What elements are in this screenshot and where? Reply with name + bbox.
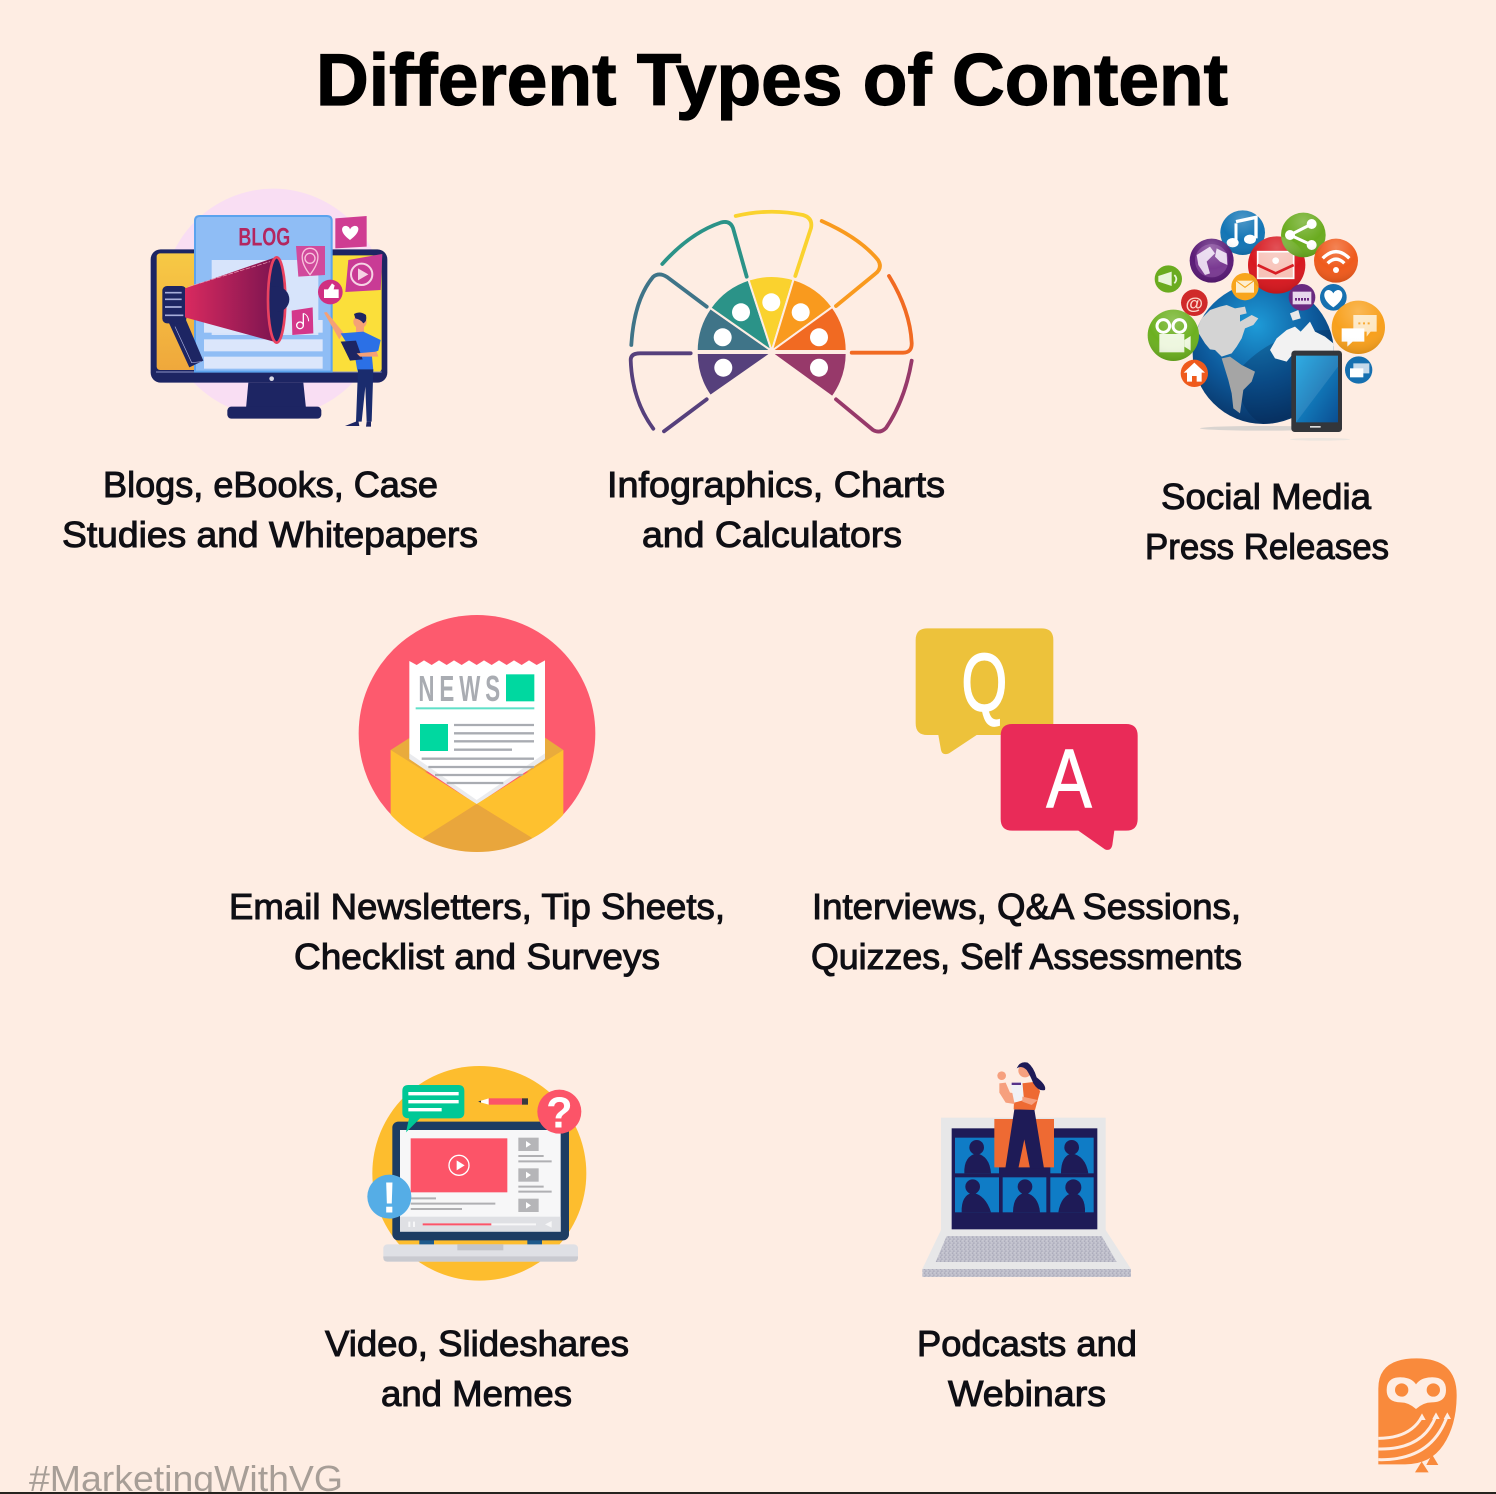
caption: blogs: Blogs, eBooks, Case — [103, 464, 438, 505]
icon: Q and A speech bubbles: A — [1046, 733, 1092, 826]
card: infographics — [607, 212, 945, 555]
card: podcasts — [917, 1062, 1137, 1414]
icon: Q and A speech bubbles: Q — [961, 638, 1007, 729]
icon: webinar laptop with presenter — [922, 1062, 1131, 1277]
icon: laptop with video player: ! — [382, 1174, 397, 1222]
caption: email newsletters — [229, 886, 725, 977]
caption: video: Video, Slideshares — [325, 1323, 629, 1364]
card: social media — [1145, 210, 1389, 567]
caption: podcasts: Podcasts and — [917, 1323, 1137, 1364]
card: video — [325, 1066, 629, 1414]
icon: globe with social bubbles: @ — [1186, 293, 1203, 313]
icon: newsletter in envelope — [359, 615, 595, 865]
caption: infographics: and Calculators — [642, 514, 902, 555]
bottom edge strip — [0, 1492, 1496, 1494]
caption: blogs — [62, 464, 478, 555]
caption: interviews: Interviews, Q&A Sessions, — [812, 886, 1241, 927]
title: Different Types of Content — [316, 40, 1228, 121]
icon: Q and A speech bubbles — [916, 628, 1138, 850]
card: blogs — [62, 189, 478, 555]
card: interviews — [811, 628, 1242, 977]
caption: podcasts — [917, 1323, 1137, 1414]
caption: email newsletters: Checklist and Surveys — [294, 936, 660, 977]
icon: laptop with video player — [367, 1066, 586, 1281]
caption: blogs: Studies and Whitepapers — [62, 514, 478, 555]
caption: video: and Memes — [381, 1373, 572, 1414]
caption: interviews: Quizzes, Self Assessments — [811, 936, 1242, 977]
caption: infographics — [607, 464, 945, 555]
icon: semi-circular segmented chart — [631, 212, 912, 432]
caption: social media — [1145, 476, 1389, 567]
card: email newsletters — [229, 615, 725, 977]
caption: video — [325, 1323, 629, 1414]
caption: interviews — [811, 886, 1242, 977]
caption: infographics: Infographics, Charts — [607, 464, 945, 505]
icon: laptop with video player: ? — [546, 1089, 573, 1137]
logo: orange owl — [1378, 1358, 1457, 1472]
icon: newsletter in envelope: NEWS — [418, 670, 505, 709]
icon: blog monitor with megaphone — [151, 189, 387, 427]
caption: social media: Social Media — [1161, 476, 1372, 517]
caption: podcasts: Webinars — [948, 1373, 1106, 1414]
caption: social media: Press Releases — [1145, 526, 1389, 567]
icon: globe with social bubbles — [1148, 210, 1385, 441]
caption: email newsletters: Email Newsletters, Tip Sheets, — [229, 886, 725, 927]
icon: blog monitor with megaphone: BLOG — [238, 224, 290, 252]
